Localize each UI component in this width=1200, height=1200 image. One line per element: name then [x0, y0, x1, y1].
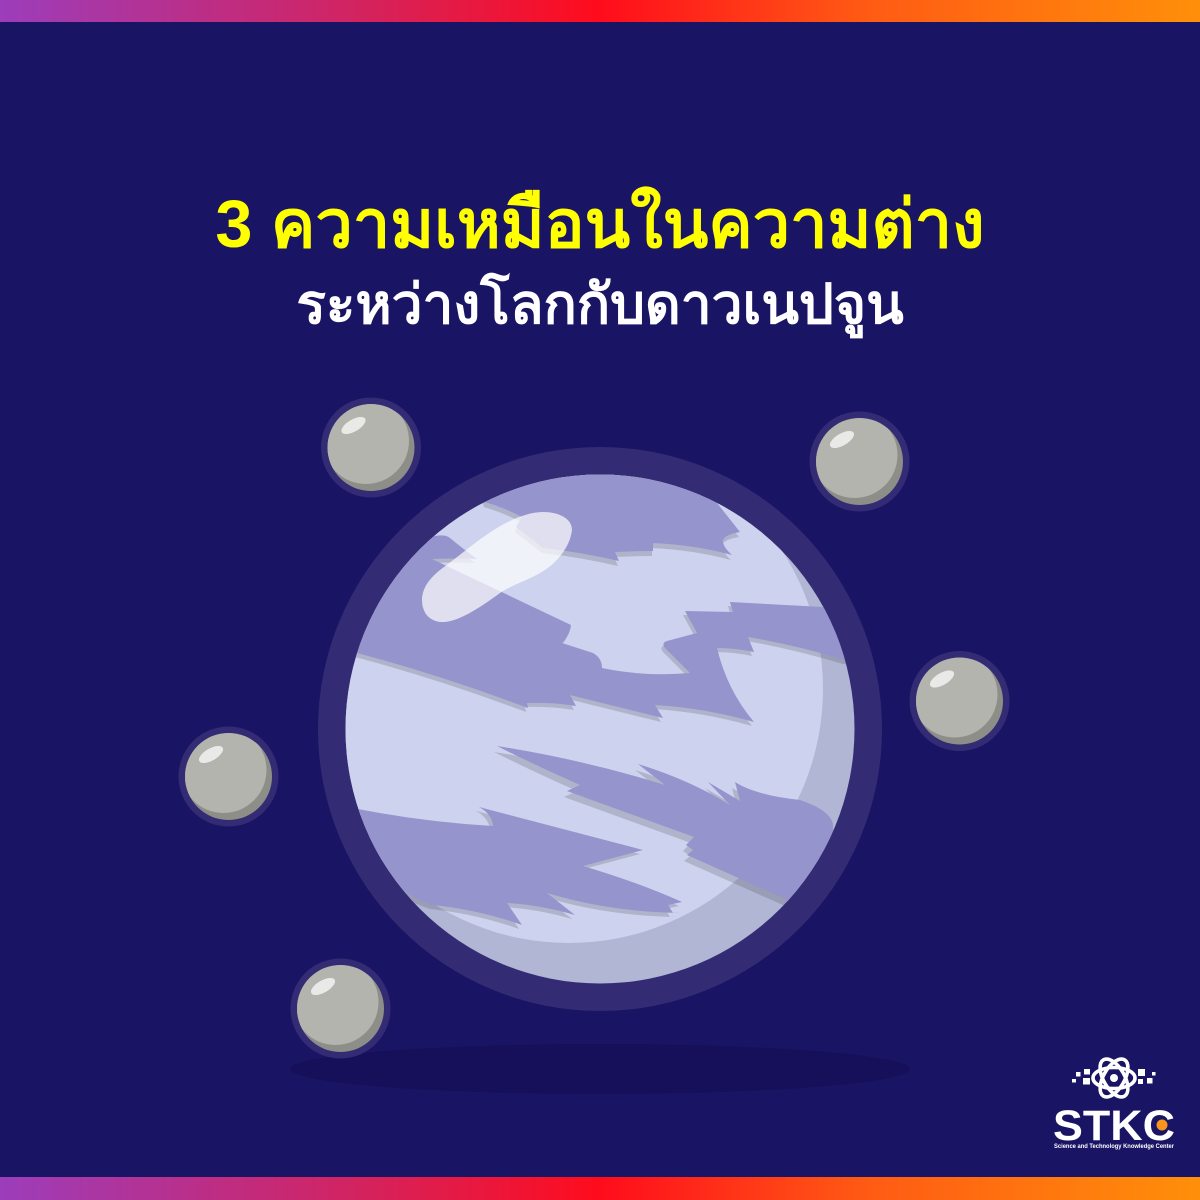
- bottom gradient bar: [0, 1177, 1200, 1200]
- logo orange dot: [1156, 1120, 1168, 1130]
- moon 5: [290, 958, 390, 1058]
- logo pixel dots: [1072, 1069, 1156, 1084]
- planet halo: [318, 447, 882, 1011]
- planet bands: [357, 474, 845, 925]
- planet body: [346, 474, 854, 984]
- title: 3 ความเหมือนในความต่าง: [215, 188, 985, 262]
- moon 1: [321, 398, 421, 498]
- logo wordmark: STKC: [1053, 1102, 1175, 1150]
- logo: STKC: [1053, 1055, 1175, 1150]
- band shadows: [318, 460, 888, 936]
- logo tagline: Science and Technology Knowledge Center: [1054, 1144, 1175, 1150]
- illustration: planet and moons: [178, 398, 1174, 1150]
- logo atom icon: [1093, 1055, 1135, 1101]
- ground shadow: [290, 1044, 910, 1094]
- subtitle: ระหว่างโลกกับดาวเนปจูน: [296, 273, 904, 335]
- planet highlight: [422, 512, 572, 622]
- moon 4: [178, 726, 278, 826]
- moon 2: [810, 412, 910, 512]
- moon 3: [910, 651, 1010, 751]
- planet: [315, 435, 890, 1011]
- top gradient bar: [0, 0, 1200, 22]
